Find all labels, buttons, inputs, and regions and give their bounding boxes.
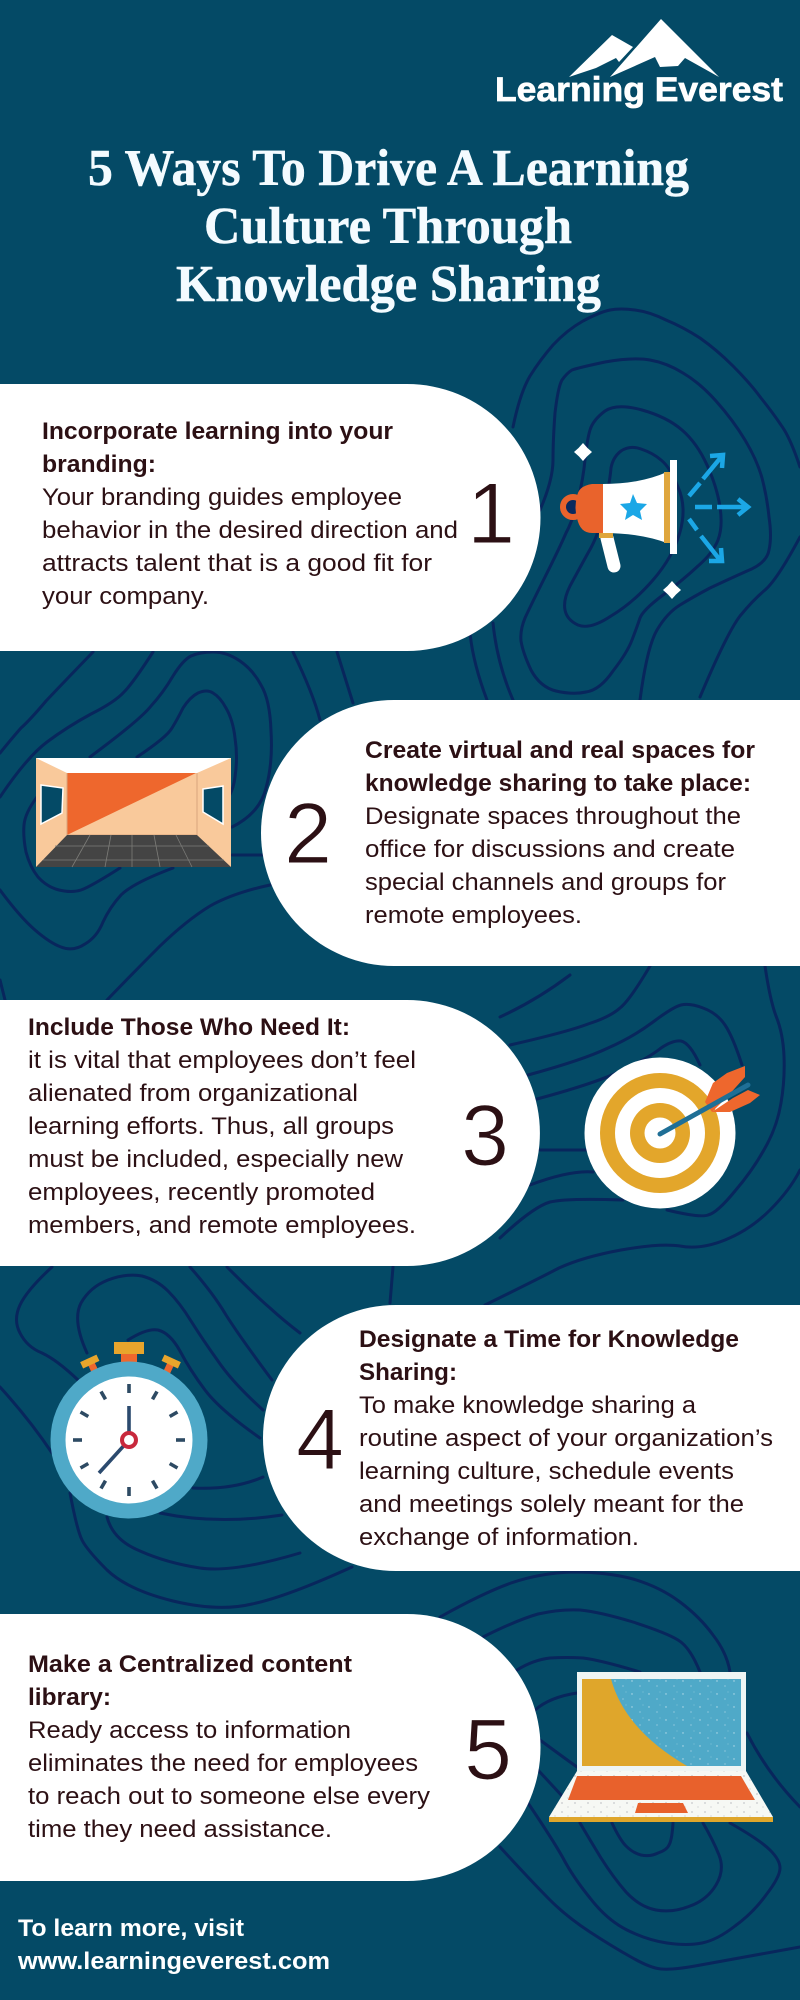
number 5: 5	[464, 1702, 512, 1798]
number 3: 3	[461, 1088, 509, 1184]
step 5 heading: Make a Centralized content	[28, 1651, 352, 1678]
icon: megaphone	[563, 443, 748, 599]
step 2 body: Designate spaces throughout the	[365, 803, 741, 830]
icon: mountains	[569, 19, 719, 77]
logo wordmark: Learning Everest	[495, 71, 783, 109]
step 4 body: learning culture, schedule events	[359, 1458, 734, 1485]
step 5 heading	[28, 1651, 352, 1711]
number 1: 1	[467, 466, 515, 562]
step 1 body: Your branding guides employee	[42, 484, 402, 511]
footer call to action: To learn more, visit	[18, 1915, 244, 1942]
step 4 heading	[359, 1326, 739, 1386]
step 5 body: to reach out to someone else every	[28, 1783, 430, 1810]
step 3 body: learning efforts. Thus, all groups	[28, 1113, 394, 1140]
step 1 heading: branding:	[42, 451, 156, 478]
title	[88, 140, 689, 313]
number 2: 2	[284, 786, 332, 882]
step 1 body: behavior in the desired direction and	[42, 517, 458, 544]
step 4 body: routine aspect of your organization’s	[359, 1425, 773, 1452]
step 4 body	[359, 1392, 773, 1551]
panel: step 5 library	[0, 1614, 540, 1881]
step 3 body: alienated from organizational	[28, 1080, 358, 1107]
step 3 heading: Include Those Who Need It:	[28, 1014, 350, 1041]
title: 5 Ways To Drive A Learning	[88, 140, 689, 197]
step 2 heading	[365, 737, 755, 797]
title: Knowledge Sharing	[176, 256, 601, 313]
icon: stopwatch	[50, 1342, 208, 1518]
step 1 body: attracts talent that is a good fit for	[42, 550, 432, 577]
step 3 body: must be included, especially new	[28, 1146, 404, 1173]
panel: step 2 spaces	[261, 700, 800, 966]
step 4 body: exchange of information.	[359, 1524, 639, 1551]
number 4: 4	[296, 1392, 344, 1488]
logo: Learning Everest	[495, 19, 783, 109]
panel: step 3 inclusion	[0, 1000, 540, 1266]
footer call to action: www.learningeverest.com	[17, 1948, 330, 1975]
icon: room	[36, 758, 231, 867]
icon: target with arrow	[584, 1058, 760, 1208]
step 2 body: office for discussions and create	[365, 836, 735, 863]
step 1 heading	[42, 418, 393, 478]
step 5 body: Ready access to information	[28, 1717, 351, 1744]
icon: laptop	[549, 1672, 773, 1822]
step 2 heading: knowledge sharing to take place:	[365, 770, 751, 797]
panel: step 1 branding	[0, 384, 540, 651]
step 4 heading: Designate a Time for Knowledge	[359, 1326, 739, 1353]
step 2 body: remote employees.	[365, 902, 582, 929]
panel: step 4 time	[263, 1305, 800, 1571]
title: Culture Through	[204, 198, 572, 255]
step 1 body: your company.	[42, 583, 209, 610]
step 1 body	[42, 484, 458, 610]
step 5 body: eliminates the need for employees	[28, 1750, 418, 1777]
step 2 body: special channels and groups for	[365, 869, 726, 896]
step 4 body: and meetings solely meant for the	[359, 1491, 744, 1518]
step 3 body: members, and remote employees.	[28, 1212, 416, 1239]
step 1 heading: Incorporate learning into your	[42, 418, 393, 445]
step 3 body: employees, recently promoted	[28, 1179, 375, 1206]
step 4 body: To make knowledge sharing a	[359, 1392, 697, 1419]
step 2 heading: Create virtual and real spaces for	[365, 737, 755, 764]
footer call to action	[17, 1915, 330, 1975]
step 5 body: time they need assistance.	[28, 1816, 332, 1843]
step 5 heading: library:	[28, 1684, 111, 1711]
step 3 body	[28, 1047, 416, 1239]
step 5 body	[28, 1717, 430, 1843]
step 3 body: it is vital that employees don’t feel	[28, 1047, 416, 1074]
step 4 heading: Sharing:	[359, 1359, 457, 1386]
step 2 body	[365, 803, 741, 929]
